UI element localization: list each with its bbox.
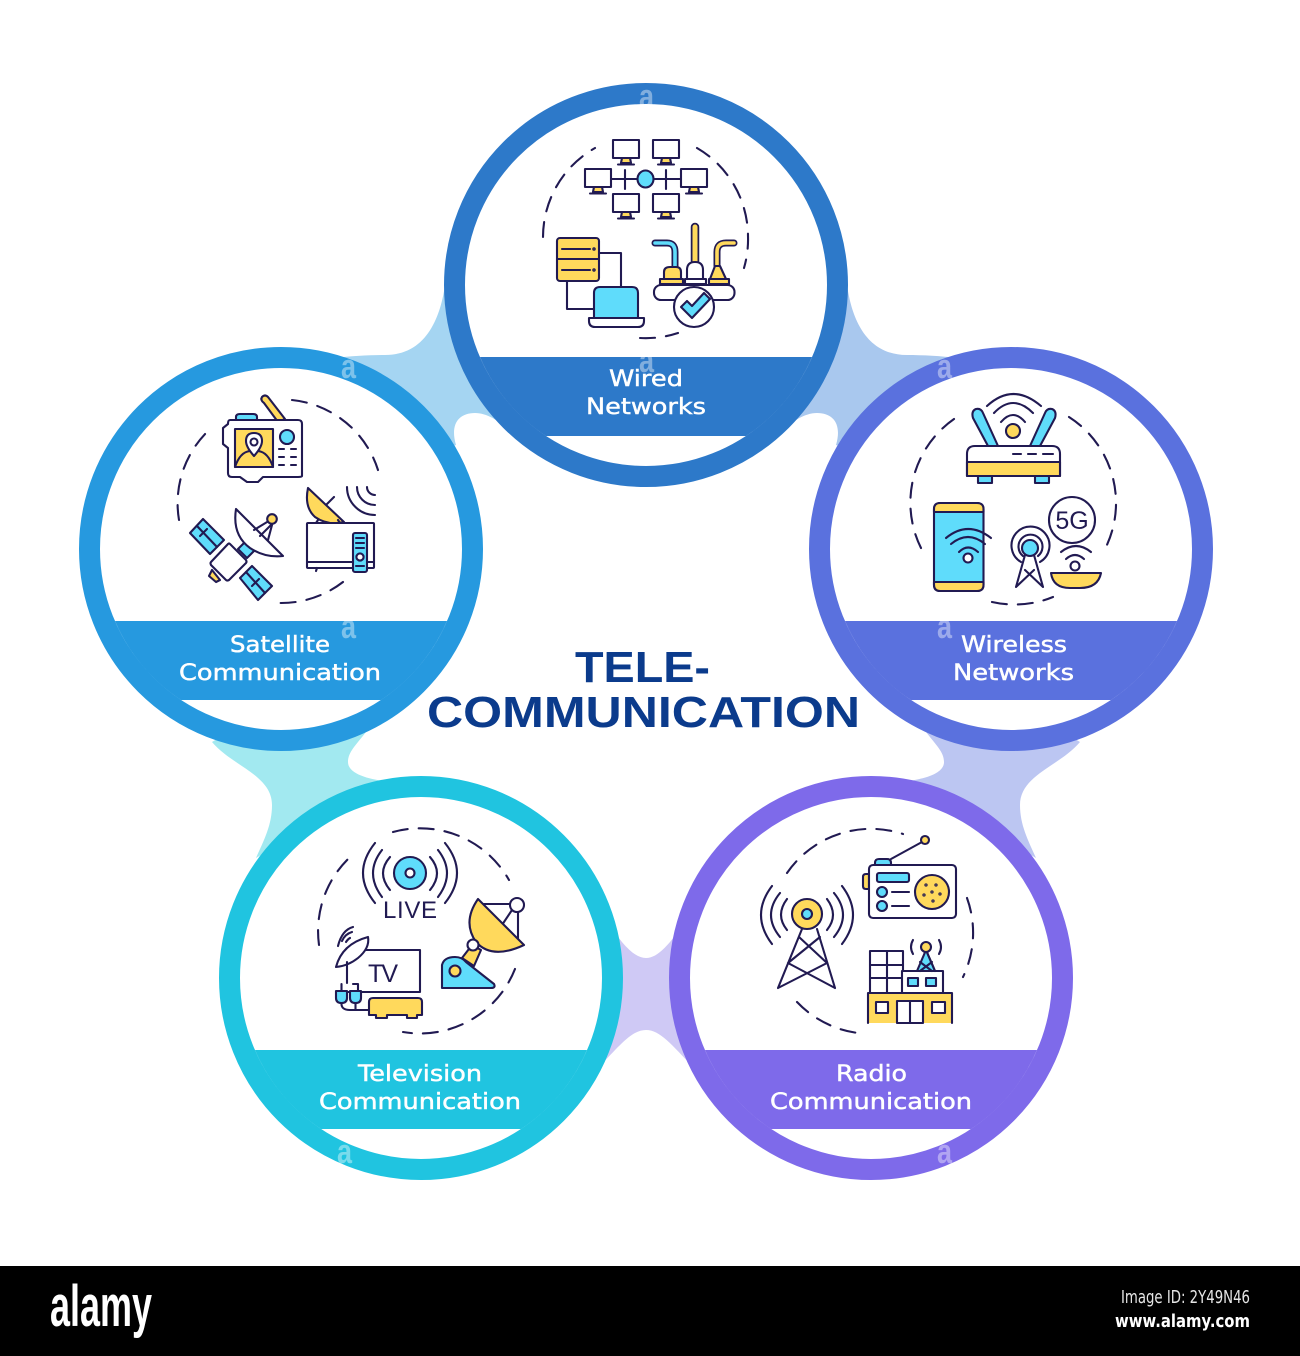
label: Radio Communication: Radio [836, 1062, 907, 1087]
icon: router [967, 394, 1060, 483]
label: Television Communication: Communication [319, 1090, 521, 1115]
label: Wireless Networks [953, 633, 1074, 686]
icon: satellite dish on base [442, 898, 524, 988]
panel: radio communication: a [937, 1133, 953, 1171]
icon: 5G tower and dish [1012, 497, 1101, 588]
panel: satellite communication [90, 348, 472, 740]
label: Satellite Communication [179, 633, 381, 686]
label: Radio Communication: Communication [770, 1090, 972, 1115]
panel: television communication [230, 786, 612, 1171]
label: Wireless Networks: Wireless [961, 633, 1067, 658]
title [427, 643, 860, 737]
icon: computer network [585, 140, 707, 218]
footer bar [0, 1266, 1300, 1356]
dashed ring [910, 417, 1116, 605]
connector: wired to satellite [335, 285, 520, 450]
icon: dish and TV with remote [307, 487, 375, 572]
image id: Image ID: 2Y49N46 [1121, 1287, 1250, 1308]
icon: live broadcast [363, 843, 457, 924]
title: TELE- [575, 643, 710, 692]
icon: GPS device [223, 396, 302, 482]
connector: wired to wireless [772, 285, 957, 450]
label: Wired Networks: Wired [609, 367, 683, 392]
dashed ring [543, 148, 748, 338]
ring [454, 94, 838, 476]
connector: television to radio [600, 920, 692, 1066]
icon: radio station building [868, 940, 952, 1023]
label: Wired Networks: Networks [586, 395, 706, 420]
panel: satellite communication: a [341, 348, 357, 386]
dashed ring [787, 829, 973, 1033]
icon: live broadcast: LIVE [383, 897, 437, 924]
icon: 5G tower and dish: 5G [1055, 507, 1089, 535]
icon: smartphone wifi [934, 503, 991, 591]
icon: radio receiver [863, 836, 956, 918]
panel: wireless networks: a [937, 348, 953, 386]
icon: cables and check [654, 227, 734, 327]
panel: wired networks [454, 78, 838, 476]
panel: wired networks: a [639, 342, 655, 380]
ring [820, 358, 1202, 740]
connector: wireless to radio [900, 700, 1080, 858]
label: Satellite Communication: Communication [179, 661, 381, 686]
ring [680, 786, 1062, 1170]
label: Television Communication [319, 1062, 521, 1115]
label: Radio Communication [770, 1062, 972, 1115]
label: Television Communication: Television [357, 1062, 482, 1087]
panel: satellite communication: a [341, 608, 357, 646]
logo: alamy: alamy [50, 1274, 152, 1339]
icon: broadcast tower [761, 886, 853, 988]
label: Satellite Communication: Satellite [230, 633, 330, 658]
icon: server and laptop [557, 238, 644, 327]
label: Wireless Networks: Networks [953, 661, 1074, 686]
panel: television communication: a [337, 1133, 353, 1171]
label band [255, 1050, 587, 1129]
label band [480, 357, 812, 436]
icon: TV with dish and plugs [336, 927, 422, 1018]
panel: wireless networks [820, 348, 1202, 740]
title: COMMUNICATION [427, 688, 860, 737]
panel: wireless networks: a [937, 608, 953, 646]
connector: satellite to television [212, 700, 392, 858]
label: Wired Networks [586, 367, 706, 420]
panel: radio communication [680, 786, 1062, 1171]
label band [115, 621, 447, 700]
dashed ring [318, 828, 515, 1033]
ring [230, 786, 612, 1170]
label band [705, 1050, 1037, 1129]
icon: satellite [190, 509, 283, 600]
panel: wired networks: a [639, 78, 655, 116]
website: www.alamy.com [1115, 1311, 1250, 1332]
icon: TV with dish and plugs: TV [368, 960, 398, 988]
label band [845, 621, 1177, 700]
ring [90, 358, 472, 740]
dashed ring [178, 400, 378, 603]
